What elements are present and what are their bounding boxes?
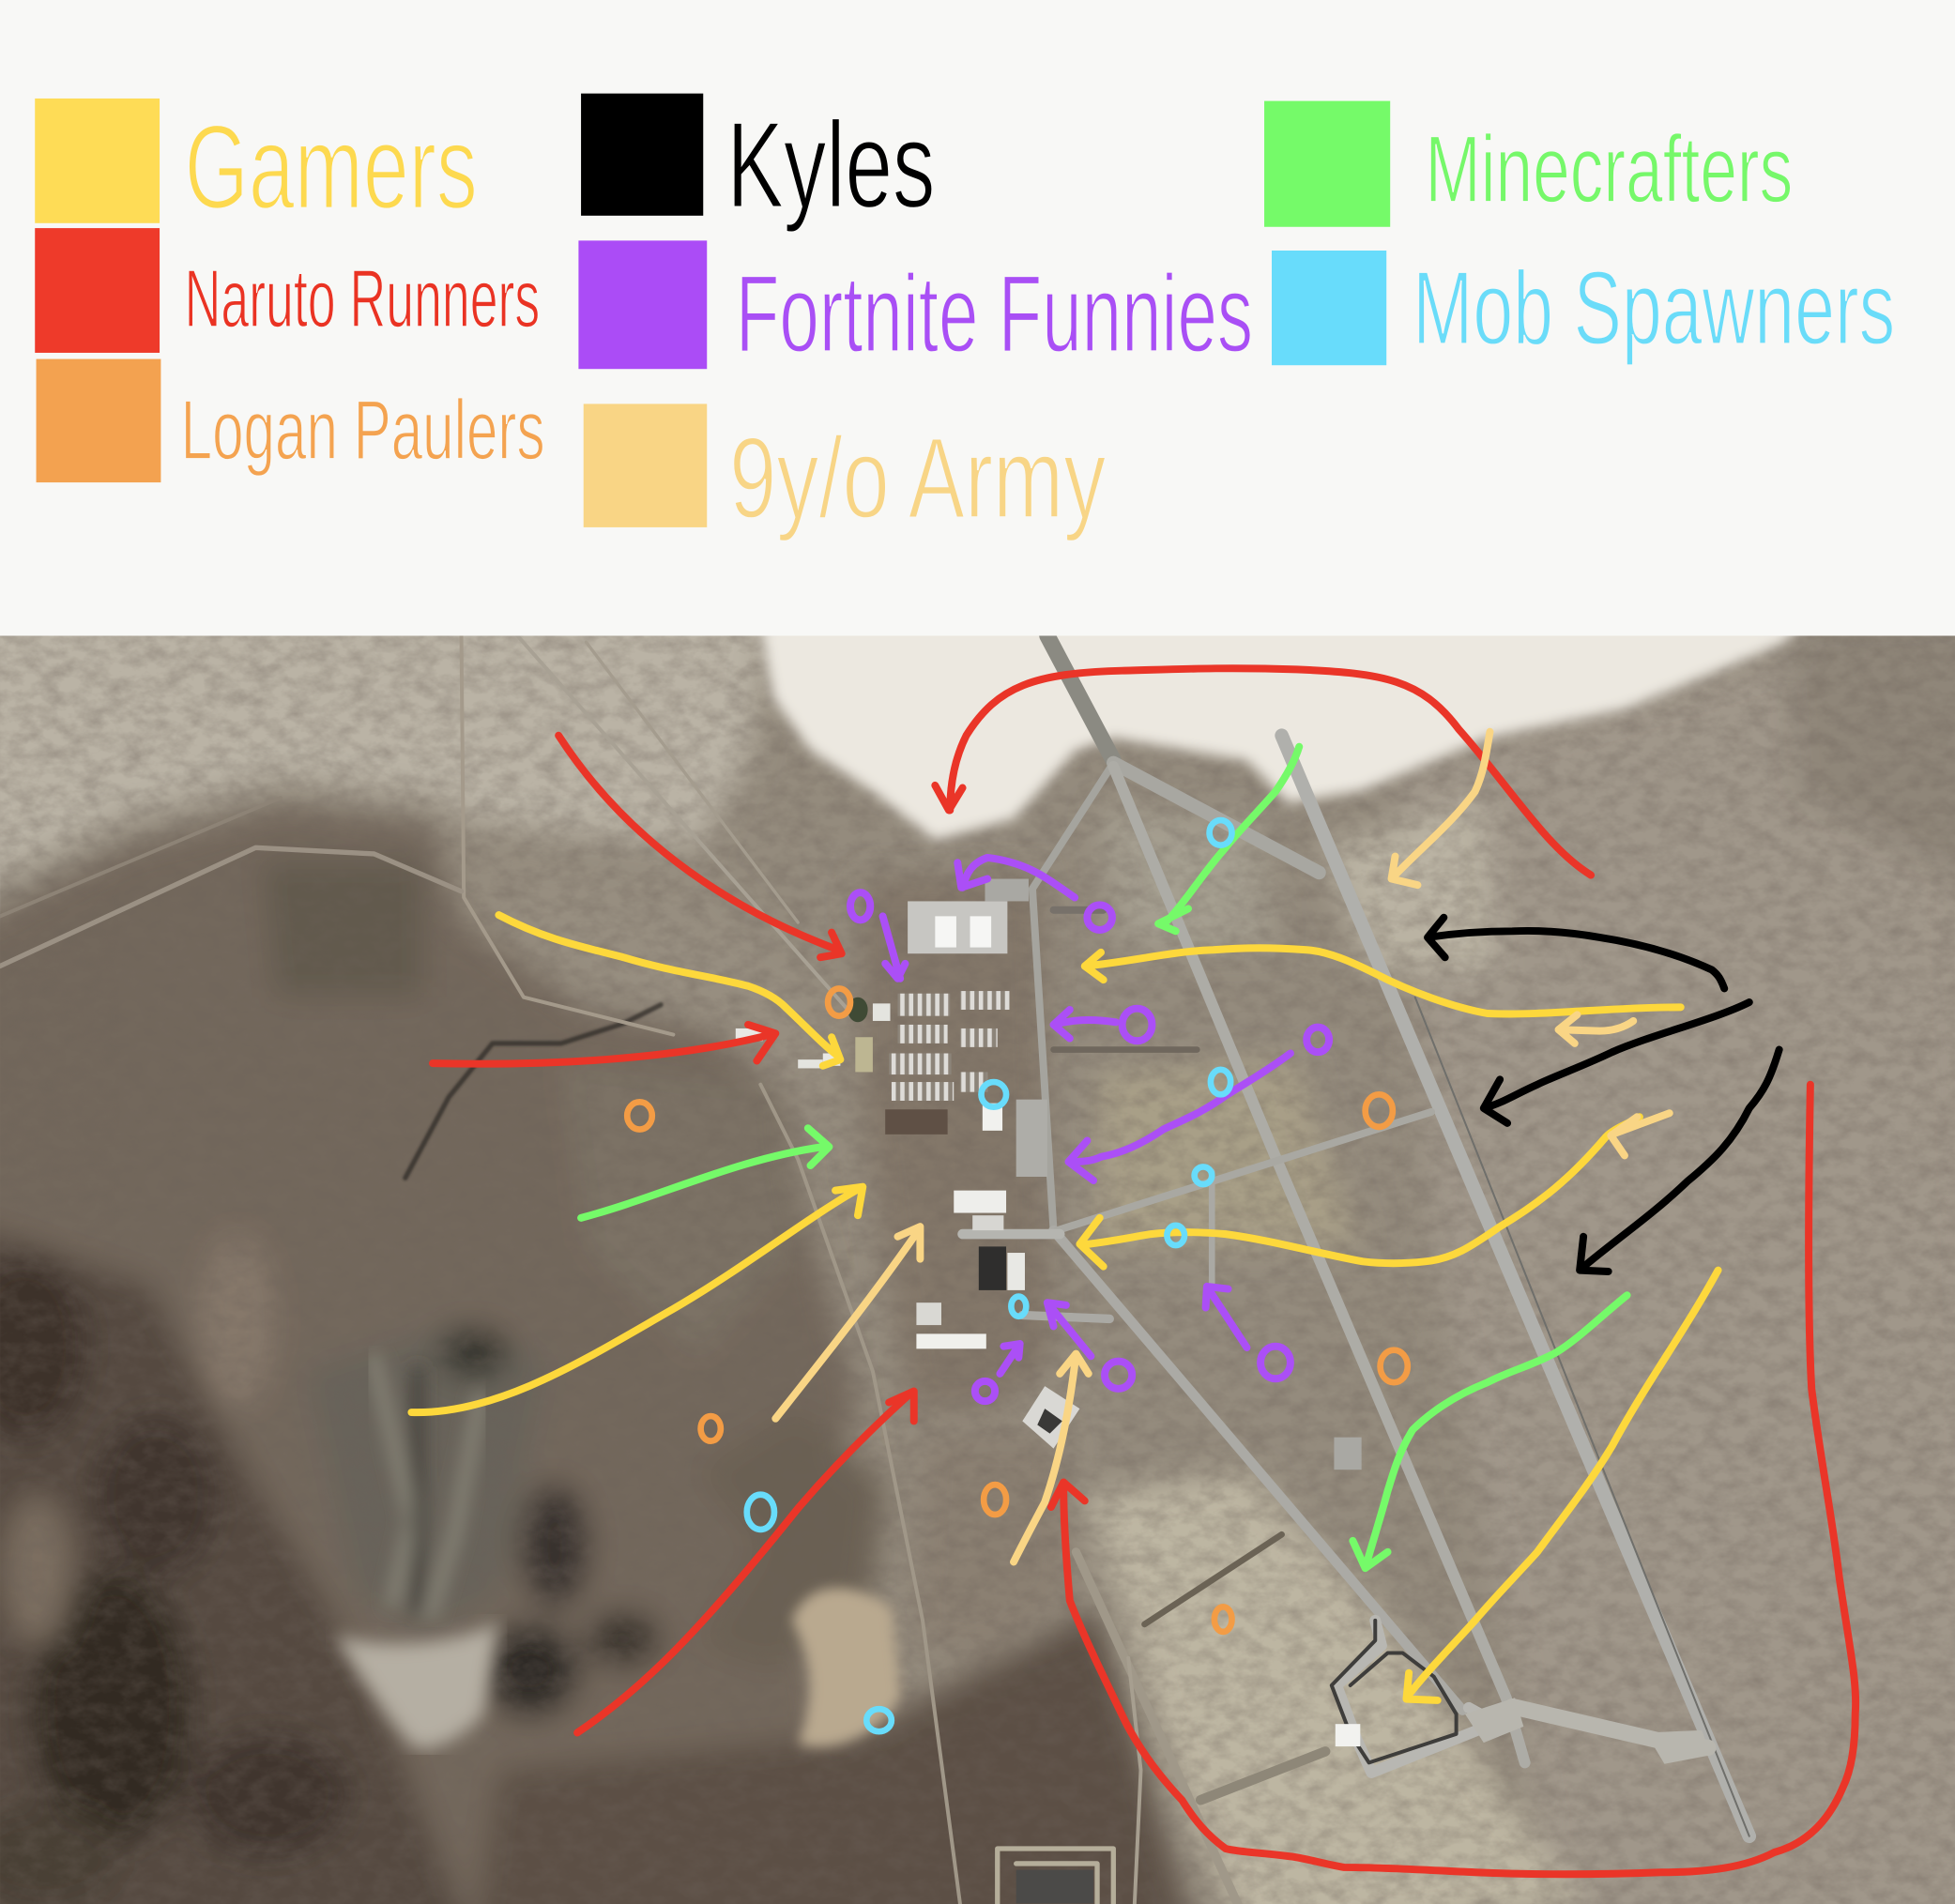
ridge line	[405, 1005, 661, 1178]
arrow: Minecrafters, south-east	[1352, 1295, 1627, 1568]
arrow: 9y/o Army, south-west	[775, 1226, 920, 1419]
arrow: Kyles, lower	[1580, 1050, 1779, 1272]
arrow: Gamers, south-west	[411, 1187, 863, 1412]
arrow: Fortnite Funnies, small	[1000, 1344, 1020, 1374]
legend: Kyles	[581, 94, 935, 234]
mountain streaks	[374, 1359, 480, 1614]
apron loop	[1016, 1438, 1711, 1903]
arrow: Gamers, east	[1085, 948, 1681, 1013]
salt lake	[760, 623, 1808, 840]
arrow: 9y/o Army, small east	[1559, 1014, 1633, 1043]
arrow: 9y/o Army, north-east	[1392, 732, 1489, 885]
arrow: Naruto Runners, south-west	[577, 1391, 914, 1732]
legend: Kyles: Kyles	[726, 97, 935, 234]
arrow: 9y/o Army, south	[1014, 1354, 1089, 1561]
legend: Fortnite Funnies: Fortnite Funnies	[736, 252, 1253, 375]
legend: Fortnite Funnies	[578, 240, 1253, 375]
arrow: Naruto Runners, around the south	[1051, 1085, 1856, 1874]
arrow: Fortnite Funnies, short west	[1054, 1010, 1116, 1039]
pale excavation	[792, 1588, 900, 1746]
arrow: Kyles, upper	[1428, 918, 1724, 988]
texture	[0, 635, 1955, 1904]
legend: 9y/o Army	[584, 404, 1106, 541]
arrow: Fortnite Funnies, long	[1068, 1053, 1291, 1180]
arrow: Kyles, middle	[1484, 1002, 1749, 1123]
satellite map	[0, 599, 1955, 1904]
arrow: Fortnite Funnies, south	[1047, 1302, 1091, 1356]
arrow: Naruto Runners, west	[433, 1025, 775, 1064]
legend: Gamers: Gamers	[185, 101, 478, 235]
roads and runways	[0, 635, 1749, 1904]
legend: Gamers	[35, 99, 478, 235]
legend: 9y/o Army: 9y/o Army	[729, 413, 1106, 541]
base buildings	[736, 879, 1079, 1449]
arrow: Gamers, north-west	[498, 915, 840, 1066]
arrow: Gamers, south-east runway	[1079, 1117, 1640, 1267]
legend	[35, 94, 1895, 541]
legend: Minecrafters: Minecrafters	[1425, 117, 1793, 222]
markers: Logan Paulers spawn points	[627, 988, 1408, 1632]
arrow: Fortnite Funnies, north-west	[883, 916, 905, 979]
markers: Fortnite Funnies spawn points	[850, 892, 1329, 1401]
page background	[0, 0, 1955, 635]
terrain	[0, 599, 1955, 1904]
arrow: Minecrafters, west	[581, 1128, 829, 1218]
arrows and markers	[411, 668, 1856, 1874]
arrow: Fortnite Funnies, north curved	[957, 858, 1075, 897]
legend: Naruto Runners: Naruto Runners	[185, 252, 540, 344]
arrow: Minecrafters, north	[1158, 747, 1299, 931]
arrow: Gamers, south-east	[1406, 1271, 1718, 1700]
arrow: Naruto Runners, north-west	[558, 736, 842, 957]
arrow: 9y/o Army, small south-east	[1611, 1113, 1670, 1155]
legend: Naruto Runners	[35, 228, 540, 353]
legend: Logan Paulers	[37, 359, 545, 482]
arrow: Fortnite Funnies, south-east	[1206, 1287, 1246, 1348]
pale slope	[334, 1621, 498, 1748]
markers: Mob Spawners spawn points	[747, 820, 1231, 1731]
legend: Minecrafters	[1264, 101, 1793, 227]
arrow: Naruto Runners, over the top	[935, 668, 1591, 876]
legend: Logan Paulers: Logan Paulers	[181, 383, 545, 478]
